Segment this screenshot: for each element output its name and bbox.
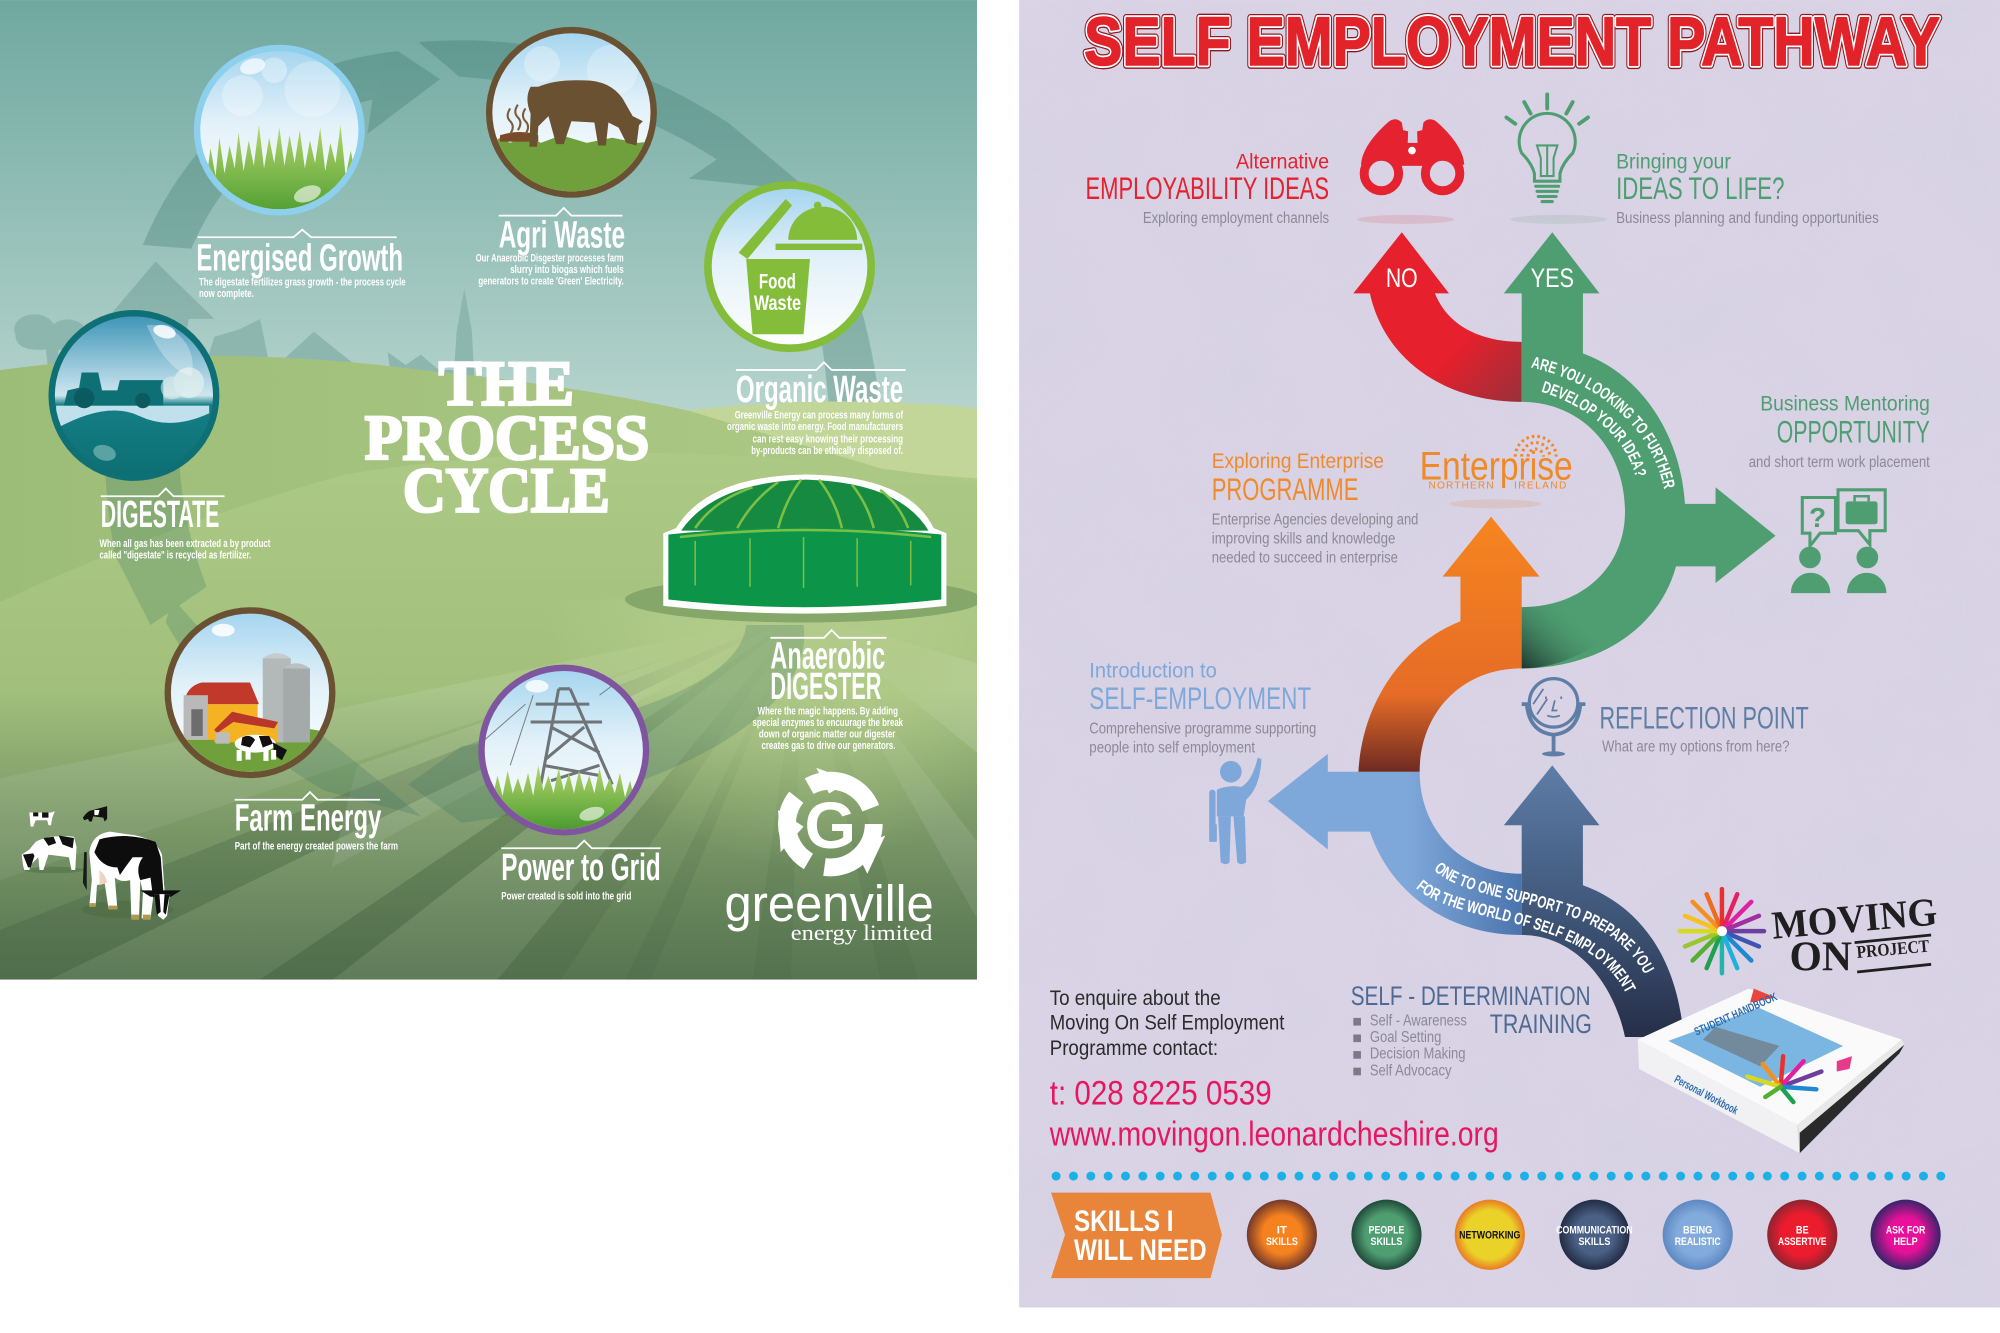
text: self determination training: SELF - DETERMINATION: [1351, 981, 1591, 1011]
icon: anaerobic digester dome: [625, 475, 982, 622]
text: reflection point: [1599, 699, 1809, 755]
lavender background: [1019, 0, 2000, 1307]
process cycle title: PROCESS: [365, 402, 649, 473]
main hill: [0, 356, 977, 602]
cycle arrows on sky: [143, 40, 880, 402]
label: digestate: DIGESTATE: [101, 493, 219, 536]
wordmark: PROJECT: [1856, 936, 1930, 962]
icon: food waste bubble: Waste: [754, 290, 801, 315]
icon: person waving: [1209, 758, 1261, 864]
label: digestate: [99, 489, 271, 562]
text: enquiry contact: Programme contact:: [1050, 1035, 1218, 1060]
village silhouette: [14, 288, 474, 383]
icon: power pylon bubble: [478, 665, 649, 836]
back hill right: [688, 401, 977, 478]
label: anaerobic digester: down of organic matter our digester: [759, 728, 896, 740]
bullet list: Self - Awareness: [1370, 1013, 1467, 1030]
label: anaerobic digester: [753, 630, 904, 752]
label: agri waste: Our Anaerobic Disgester processes farm: [476, 253, 624, 265]
label: farm energy: [235, 792, 398, 853]
curved text: one to one support: ONE TO ONE SUPPORT TO PREPARE YOU: [1436, 862, 1654, 973]
skill: people skills: SKILLS: [1371, 1236, 1403, 1248]
text: self determination training: TRAINING: [1490, 1009, 1592, 1039]
skill: be assertive: ASSERTIVE: [1778, 1236, 1827, 1248]
label: power to grid: [501, 841, 661, 902]
icon: farm bubble: [165, 607, 335, 791]
label: digestate: When all gas has been extracted a by product: [99, 538, 271, 550]
logo: moving on project: [1680, 889, 1939, 981]
icon: binoculars: [1361, 119, 1464, 191]
skill: being realistic: REALISTIC: [1675, 1236, 1721, 1248]
arrow: orange enterprise: [1358, 517, 1540, 772]
bin lid: [739, 199, 792, 259]
skill: communication skills: COMMUNICATION: [1556, 1224, 1633, 1236]
icon: herd of cows: [22, 806, 181, 920]
label: power to grid: Power to Grid: [501, 846, 661, 889]
large cow: [83, 832, 181, 920]
arrow: green yes: YES: [1531, 263, 1574, 293]
logo: greenville energy limited: [724, 768, 934, 945]
wordmark: MOVING: [1770, 890, 1939, 948]
process cycle title: [364, 361, 648, 514]
text: business mentoring: OPPORTUNITY: [1777, 414, 1930, 450]
label: energised growth: now complete.: [199, 288, 254, 300]
logo: enterprise northern ireland: [1420, 436, 1573, 492]
bin: [746, 259, 810, 334]
text: introduction to self-employment: Introduction to: [1089, 657, 1217, 682]
sky background: [0, 0, 977, 434]
small cow right: [83, 806, 107, 821]
label: agri waste: slurry into biogas which fuels: [510, 264, 624, 276]
icon: food waste bubble: [704, 181, 875, 352]
label: anaerobic digester: DIGESTER: [770, 665, 881, 708]
icon: student handbook binder: [1638, 989, 1904, 1153]
icon: food waste bubble: Food: [759, 268, 796, 293]
text: alternative employability ideas: Exploring employment channels: [1143, 210, 1329, 227]
label: anaerobic digester: Anaerobic: [770, 634, 885, 677]
text: ideas to life: Bringing your: [1616, 148, 1731, 173]
label: digestate: called "digestate" is recycled as fertilizer.: [99, 550, 251, 562]
binder cover text: STUDENT HANDBOOK: [1693, 991, 1780, 1039]
curved text: one to one support: FOR THE WORLD OF SELF EMPLOYMENT: [1416, 880, 1636, 992]
text: phone number: t: 028 8225 0539: [1050, 1075, 1272, 1113]
icon: energised growth grass bubble: [194, 45, 365, 217]
skill: being realistic: BEING: [1683, 1224, 1712, 1236]
label: energised growth: Energised Growth: [196, 236, 403, 279]
label: organic waste: can rest easy knowing their processing: [753, 434, 903, 446]
process cycle title: THE: [439, 347, 574, 418]
icon shadows: [1357, 215, 1607, 508]
skill: networking: NETWORKING: [1459, 1230, 1520, 1242]
banner: skills i will need: SKILLS I: [1074, 1205, 1173, 1238]
bullet list: [1353, 1013, 1467, 1079]
label: energised growth: The digestate fertilizes grass growth - the process cycle: [199, 277, 406, 289]
label: agri waste: Agri Waste: [499, 213, 625, 256]
label: organic waste: [727, 362, 906, 457]
logo: greenville energy limited: greenville: [724, 875, 934, 932]
skill: it skills: [1247, 1200, 1317, 1270]
panel: self employment pathway: [1019, 0, 2000, 1308]
binder spine text: Personal Workbook: [1672, 1074, 1740, 1117]
arrow: light blue to self employment: [1268, 754, 1522, 935]
logo: enterprise northern ireland: Enterprise: [1420, 445, 1573, 489]
label: agri waste: [476, 208, 625, 287]
label: agri waste: generators to create 'Green' Electricity.: [478, 275, 624, 287]
text: enquiry contact: Moving On Self Employment: [1050, 1009, 1284, 1034]
skill: people skills: PEOPLE: [1369, 1224, 1405, 1236]
icon: colour star: [1680, 889, 1764, 973]
text: enquiry contact: [1050, 985, 1284, 1060]
small cow left: [29, 811, 55, 827]
food dome: [776, 207, 862, 250]
logo: enterprise northern ireland: IRELAND: [1514, 481, 1566, 492]
bullet list: Self Advocacy: [1370, 1062, 1452, 1079]
text: alternative employability ideas: EMPLOYABILITY IDEAS: [1085, 170, 1329, 206]
text: exploring enterprise: [1212, 448, 1418, 567]
text: ideas to life: Business planning and funding opportunities: [1616, 210, 1879, 227]
medium cow: [22, 836, 77, 870]
skill: ask for help: ASK FOR: [1886, 1224, 1926, 1236]
label: organic waste: Organic Waste: [736, 368, 903, 411]
skill: it skills: IT: [1277, 1224, 1287, 1236]
label: power to grid: Power created is sold into the grid: [501, 890, 631, 902]
skill: it skills: SKILLS: [1266, 1236, 1298, 1248]
sunburst rays: [0, 600, 977, 980]
skill: people skills: [1351, 1200, 1422, 1270]
arrow: no red: NO: [1386, 263, 1418, 293]
text: introduction to self-employment: [1089, 657, 1316, 757]
text: introduction to self-employment: Comprehensive programme supporting: [1089, 720, 1316, 737]
banner: skills i will need: [1051, 1193, 1222, 1278]
wordmark: ON: [1790, 934, 1852, 981]
arrow: green yes: [1504, 232, 1776, 668]
foreground hill: [0, 453, 977, 980]
text: exploring enterprise: Enterprise Agencies developing and: [1212, 511, 1418, 528]
label: anaerobic digester: creates gas to drive our generators.: [761, 740, 895, 752]
icon: mentoring people: ?: [1809, 502, 1826, 533]
text: website: www.movingon.leonardcheshire.org: [1049, 1115, 1499, 1153]
label: anaerobic digester: special enzymes to encuurage the break: [753, 717, 904, 729]
cycle arrows on grass: [105, 262, 804, 823]
curved text: are you looking: ARE YOU LOOKING TO FURTHER: [1531, 357, 1674, 490]
skill: ask for help: HELP: [1893, 1236, 1918, 1248]
text: introduction to self-employment: SELF-EMPLOYMENT: [1089, 680, 1311, 716]
skill: be assertive: BE: [1796, 1224, 1809, 1236]
label: farm energy: Farm Energy: [235, 796, 382, 839]
icon: digestate tractor bubble: [48, 310, 219, 481]
skill: communication skills: [1556, 1200, 1633, 1270]
label: organic waste: organic waste into energy. Food manufacturers: [727, 421, 903, 433]
icon: light bulb: [1506, 94, 1588, 202]
process cycle title: CYCLE: [403, 455, 610, 526]
label: farm energy: Part of the energy created powers the farm: [235, 841, 398, 853]
text: reflection point: What are my options from here?: [1602, 738, 1790, 755]
bullet list: Decision Making: [1370, 1046, 1466, 1063]
text: exploring enterprise: needed to succeed in enterprise: [1212, 550, 1398, 567]
arrow: dark blue one to one: [1504, 765, 1684, 1037]
text: exploring enterprise: PROGRAMME: [1212, 471, 1358, 507]
icon: agri waste cow bubble: [485, 27, 663, 208]
curved text: are you looking: DEVELOP YOUR IDEA?: [1542, 381, 1646, 475]
cow silhouette: [527, 80, 643, 147]
skill: ask for help: [1871, 1200, 1941, 1270]
icon: recycle G: G: [805, 789, 856, 863]
text: introduction to self-employment: people into self employment: [1089, 740, 1256, 757]
label: organic waste: by-products can be ethically disposed of.: [751, 445, 903, 457]
skill: networking: [1455, 1200, 1525, 1270]
arrow: no red: [1353, 232, 1522, 402]
text: business mentoring: and short term work placement: [1749, 454, 1930, 471]
banner: skills i will need: WILL NEED: [1074, 1234, 1207, 1267]
label: organic waste: Greenville Energy can process many forms of: [735, 409, 903, 421]
skill: be assertive: [1767, 1200, 1837, 1270]
logo: enterprise northern ireland: NORTHERN: [1429, 481, 1494, 492]
text: exploring enterprise: Exploring Enterprise: [1212, 448, 1384, 473]
text: exploring enterprise: improving skills and knowledge: [1212, 530, 1396, 547]
text: ideas to life: [1616, 148, 1879, 227]
text: self determination training: [1351, 981, 1592, 1079]
skill: communication skills: SKILLS: [1578, 1236, 1611, 1248]
text: alternative employability ideas: [1085, 148, 1329, 227]
label: energised growth: [196, 230, 406, 300]
text: business mentoring: Business Mentoring: [1760, 391, 1930, 416]
bullet list: Goal Setting: [1370, 1029, 1441, 1046]
logo: greenville energy limited: energy limited: [791, 921, 933, 945]
icon: reflection mirror: [1522, 679, 1585, 756]
icon: recycle G: [778, 768, 885, 874]
label: anaerobic digester: Where the magic happens. By adding: [758, 705, 898, 717]
text: alternative employability ideas: Alternative: [1236, 148, 1329, 173]
text: business mentoring: [1749, 391, 1930, 471]
text: ideas to life: IDEAS TO LIFE?: [1616, 170, 1784, 206]
icon: mentoring people: [1791, 490, 1886, 593]
text: reflection point: REFLECTION POINT: [1599, 699, 1809, 735]
wordmark: [1770, 890, 1939, 981]
skill: being realistic: [1663, 1200, 1733, 1270]
panel: the process cycle: [0, 0, 982, 980]
text: enquiry contact: To enquire about the: [1050, 985, 1221, 1010]
